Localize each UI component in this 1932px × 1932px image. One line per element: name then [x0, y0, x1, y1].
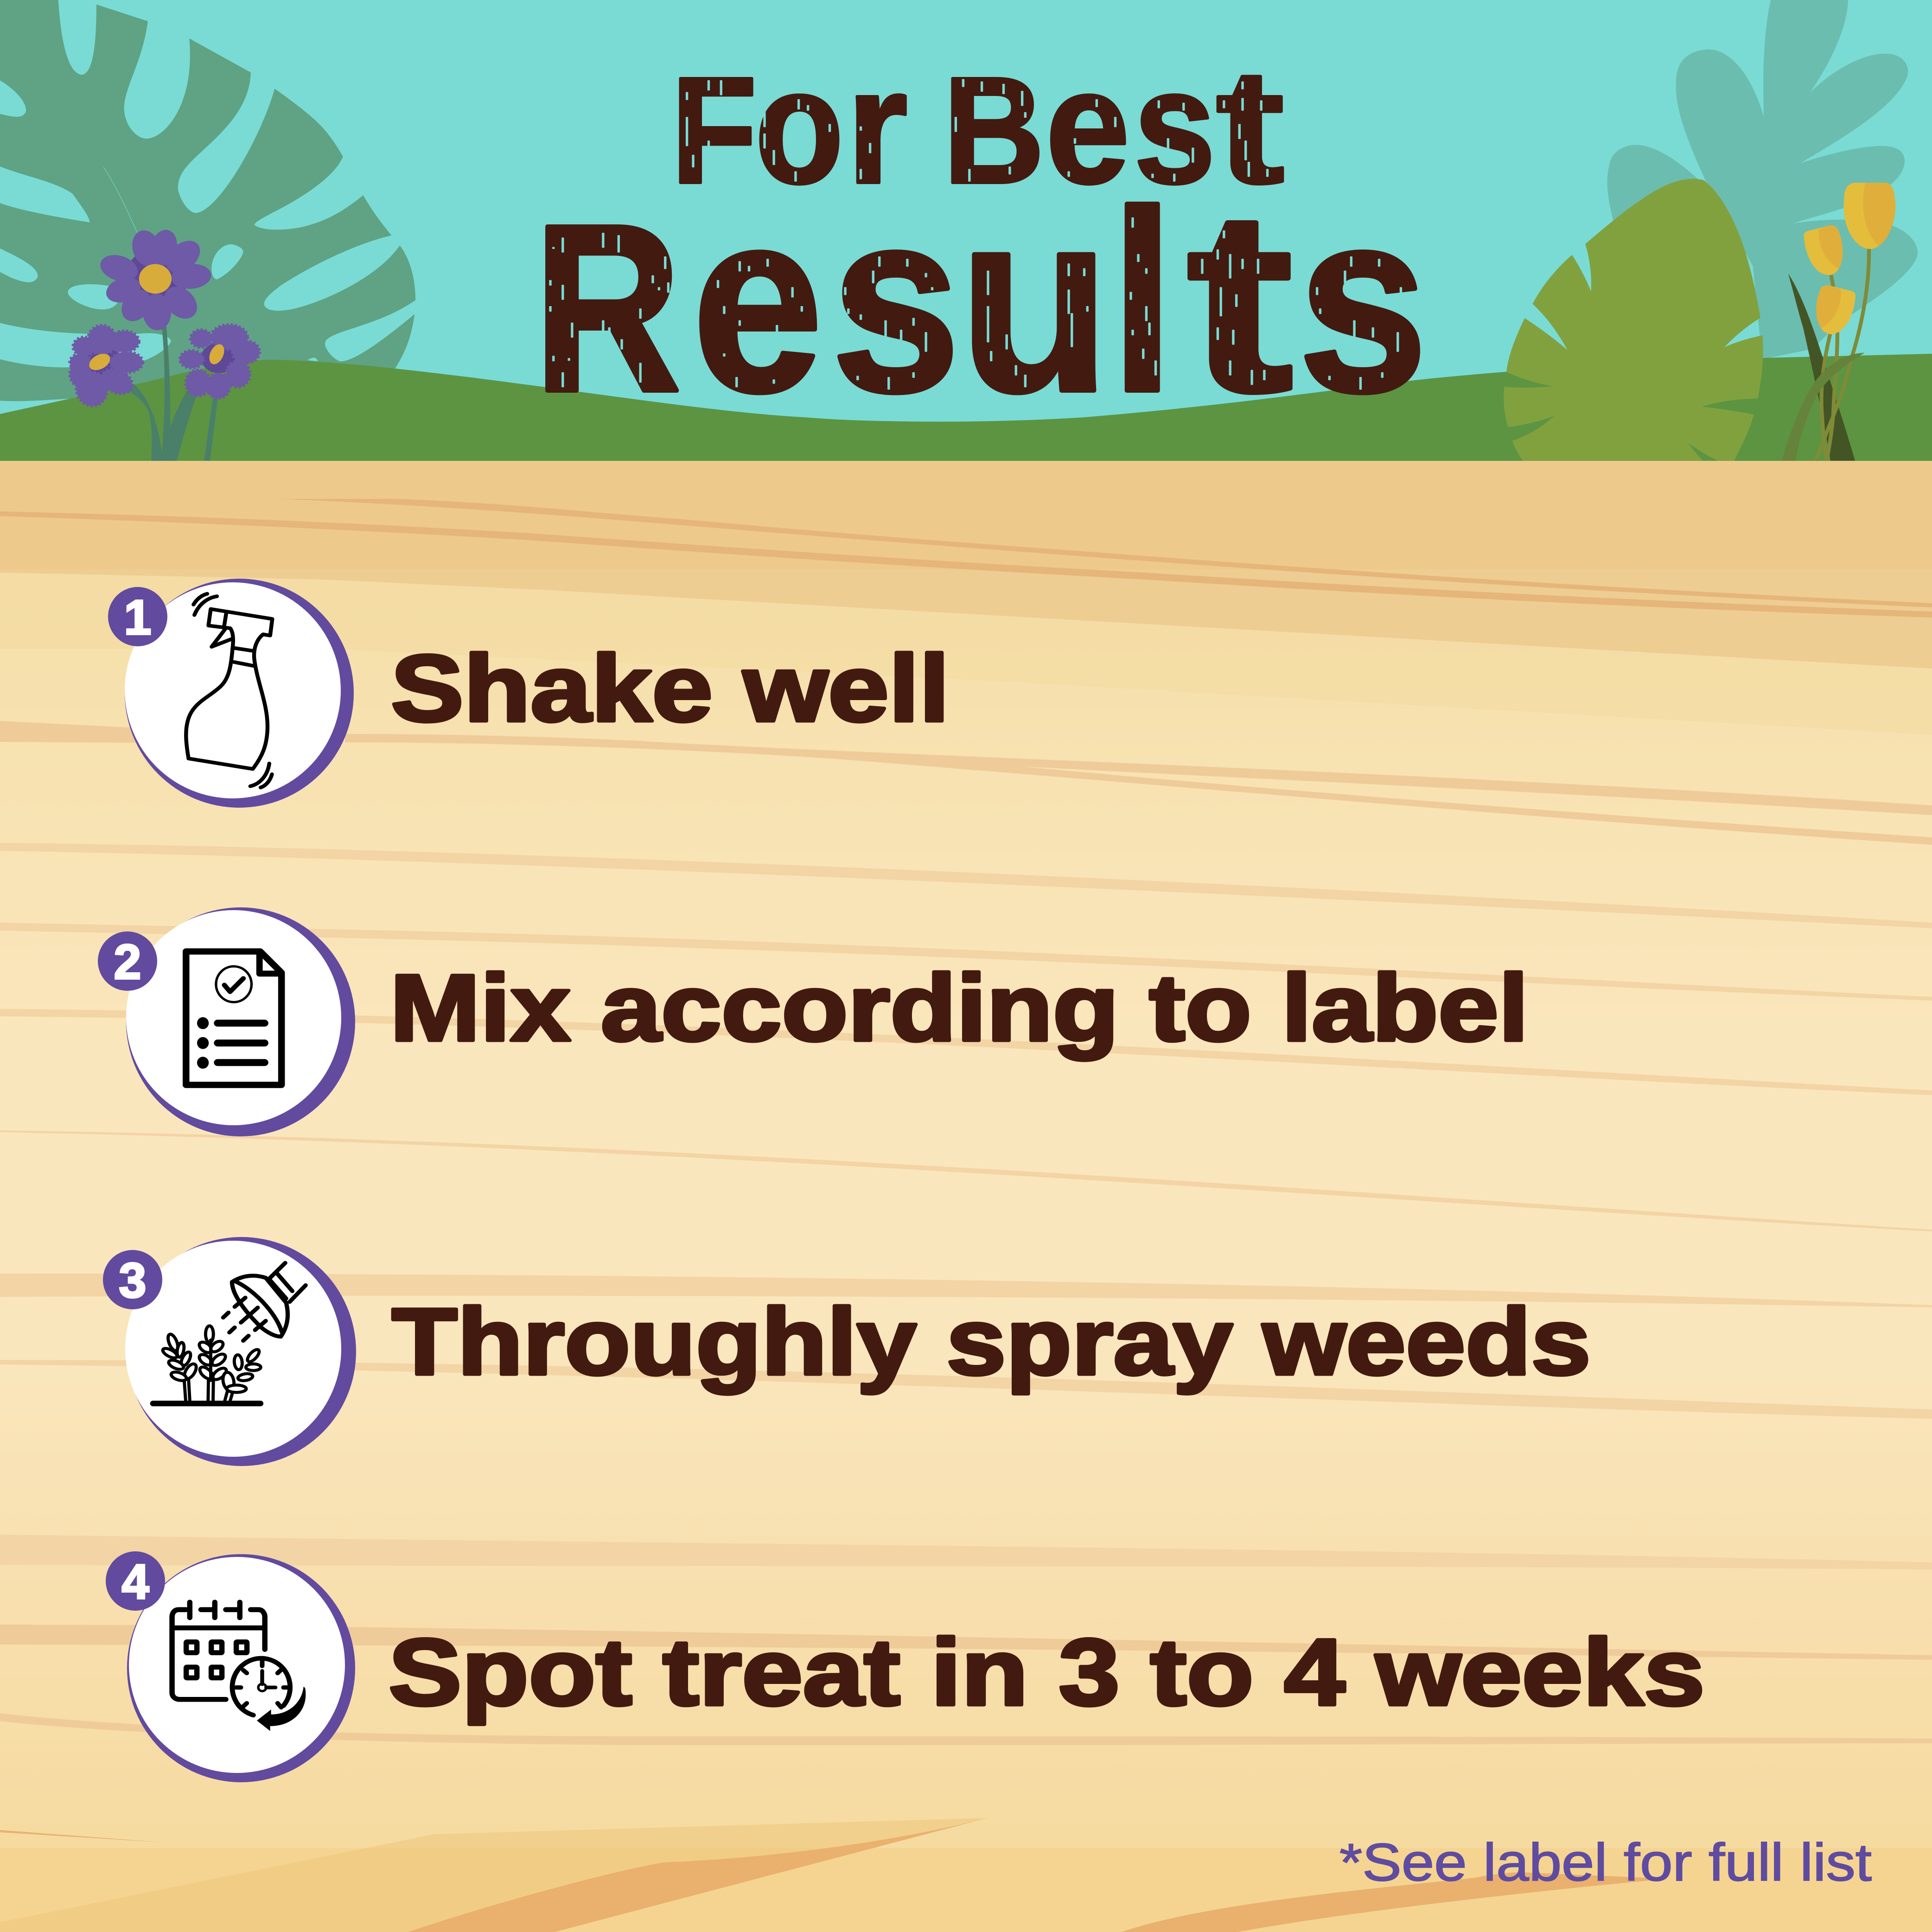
icon circle 2 — [126, 907, 355, 1136]
icon circle 3 — [125, 1237, 356, 1466]
text: shake well: Shake well — [391, 636, 950, 741]
title — [534, 35, 1428, 445]
sky — [0, 0, 1932, 461]
icon: label document — [186, 951, 281, 1085]
dark blade — [1788, 274, 1855, 461]
title line: Results: t — [1186, 158, 1294, 445]
title line: Results: R — [534, 175, 681, 441]
back leaf — [1607, 0, 1918, 359]
title line: For Best: t — [1216, 35, 1285, 217]
step 1: shake well — [108, 579, 950, 808]
icon circle 1 — [125, 579, 354, 808]
icon circle 4 — [127, 1554, 355, 1782]
badge 2: 2 — [114, 935, 141, 989]
title line: For Best: F — [671, 46, 757, 215]
distressed texture flecks — [550, 79, 1401, 389]
badge 1 — [108, 587, 167, 646]
ground hill — [0, 354, 1932, 461]
badge 3 — [103, 1250, 162, 1309]
badge 1: 1 — [124, 590, 151, 645]
badge 4: 4 — [122, 1555, 149, 1609]
title line: For Best: e — [1046, 35, 1130, 217]
tulip stems — [1816, 249, 1869, 461]
step 2: mix according to label — [98, 907, 1529, 1136]
tulips and green leaf — [1504, 179, 1895, 461]
header scene — [0, 0, 1932, 461]
title line: For Best: B — [943, 46, 1045, 215]
step 3: thoroughly spray weeds — [103, 1237, 1591, 1466]
title line: Results: s — [1298, 158, 1428, 445]
title line: Results: u — [959, 158, 1110, 445]
text: mix according to label: Mix according to label — [390, 955, 1529, 1061]
title line: For Best: s — [1134, 35, 1216, 217]
title line: For Best: o — [755, 35, 844, 217]
badge 3: 3 — [119, 1253, 146, 1308]
badge 2 — [98, 931, 157, 991]
icon: spray bottle — [186, 594, 272, 788]
title line: Results: s — [831, 158, 960, 445]
footnote: *See label for full list — [1339, 1833, 1872, 1892]
monstera leaf — [0, 0, 415, 414]
title line: Results: l — [1111, 158, 1174, 445]
text: spot treat: Spot treat in 3 to 4 weeks — [389, 1620, 1705, 1725]
badge 4 — [106, 1551, 165, 1611]
tulip heads — [1804, 183, 1895, 334]
step 4: spot treat — [106, 1551, 1705, 1782]
front leaf — [1504, 179, 1763, 461]
grass blade — [1782, 353, 1865, 461]
title line: For Best: r — [847, 35, 908, 217]
title line: Results: e — [692, 158, 823, 445]
purple flowers — [70, 227, 260, 461]
wood panel background — [0, 461, 1932, 1932]
icon: calendar and clock — [172, 1602, 306, 1731]
text: throughly spray weeds: Throughly spray weeds — [392, 1289, 1591, 1395]
icon: sprayer over weeds — [153, 1263, 306, 1403]
